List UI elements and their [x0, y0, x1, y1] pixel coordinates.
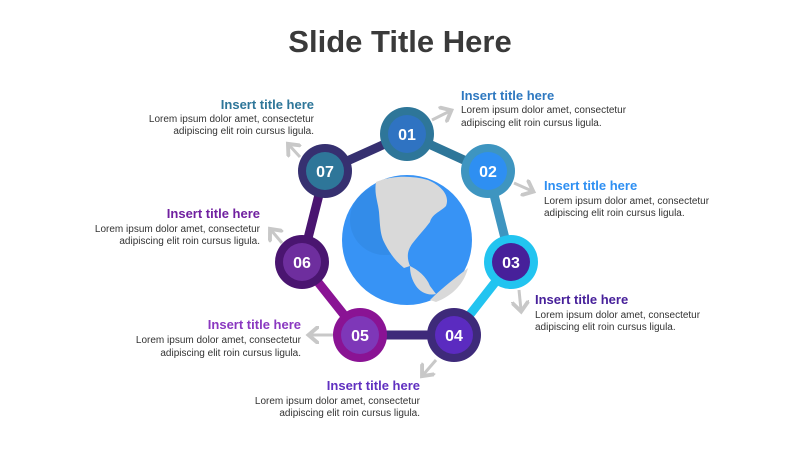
icon: globe [342, 175, 472, 305]
text block 03: adipiscing elit roin cursus ligula. [535, 322, 676, 333]
arrows [271, 111, 532, 375]
text block 06: Lorem ipsum dolor amet, consectetur [95, 224, 261, 235]
node 02: 02 [479, 164, 497, 181]
node 03 [484, 235, 538, 289]
text block 07: Lorem ipsum dolor amet, consectetur [149, 114, 315, 125]
text block 07 [149, 97, 315, 137]
text block 01: Lorem ipsum dolor amet, consectetur [461, 105, 627, 116]
text block 05: adipiscing elit roin cursus ligula. [160, 348, 301, 359]
text block 05 [136, 317, 302, 359]
text block 02 [544, 178, 710, 219]
text block 06: adipiscing elit roin cursus ligula. [119, 236, 260, 247]
title: Slide Title Here [288, 24, 512, 59]
text block 03 [535, 292, 701, 333]
text block 03: Lorem ipsum dolor amet, consectetur [535, 310, 701, 321]
node 01 [380, 107, 434, 161]
text block 06: Insert title here [167, 206, 260, 221]
text block 01: adipiscing elit roin cursus ligula. [461, 118, 602, 129]
text block 03: Insert title here [535, 292, 628, 307]
node 06 [275, 235, 329, 289]
text block 02: adipiscing elit roin cursus ligula. [544, 208, 685, 219]
node 01: 01 [398, 127, 416, 144]
text block 04: adipiscing elit roin cursus ligula. [279, 408, 420, 419]
node 05 [333, 308, 387, 362]
node 05: 05 [351, 328, 369, 345]
text block 01: Insert title here [461, 88, 554, 103]
node 07 [298, 144, 352, 198]
text block 04: Insert title here [327, 378, 420, 393]
text block 02: Lorem ipsum dolor amet, consectetur [544, 196, 710, 207]
node 06: 06 [293, 255, 311, 272]
text block 04: Lorem ipsum dolor amet, consectetur [255, 396, 421, 407]
connectors [302, 134, 511, 335]
node 04: 04 [445, 328, 463, 345]
text block 04 [255, 378, 421, 419]
node 03: 03 [502, 255, 520, 272]
node 02 [461, 144, 515, 198]
text block 02: Insert title here [544, 178, 637, 193]
text block 06 [95, 206, 261, 247]
text block 05: Insert title here [208, 317, 301, 332]
text block 07: adipiscing elit roin cursus ligula. [173, 126, 314, 137]
text block 01 [461, 88, 627, 129]
text block 07: Insert title here [221, 97, 314, 112]
node 07: 07 [316, 164, 334, 181]
text block 05: Lorem ipsum dolor amet, consectetur [136, 335, 302, 346]
node 04 [427, 308, 481, 362]
